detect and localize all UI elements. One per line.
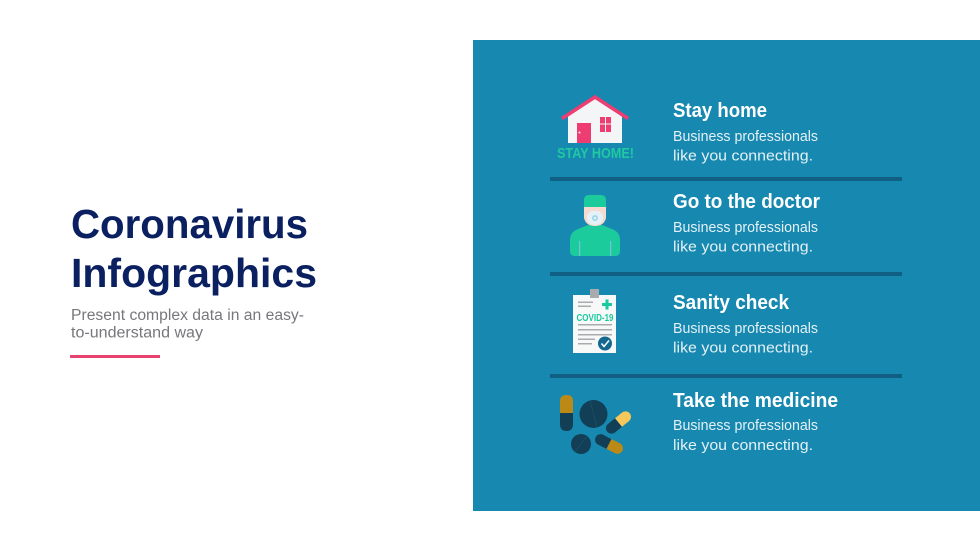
item text: sanity check: Business professionals [673,320,818,337]
divider 2 [550,272,902,276]
item text: doctor: like you connecting. [673,238,813,256]
title [71,201,317,296]
icon: covid-19 clipboard [573,289,616,353]
item text: doctor: Business professionals [673,219,818,236]
icon: doctor [570,195,620,256]
icon: medicine pills [560,395,633,456]
divider 3 [550,374,902,378]
item text: stay home [673,128,818,164]
title: Coronavirus [71,201,308,247]
icon: covid-19 clipboard: COVID-19 [576,312,614,324]
item text: take the medicine: like you connecting. [673,437,813,454]
subtitle [71,307,304,342]
item text: take the medicine: Business professionals [673,417,818,434]
panel: blue background [473,40,980,511]
item text: sanity check [673,320,818,356]
icon: stay home house: STAY HOME! [557,145,634,162]
subtitle: to-understand way [71,324,203,342]
item text: take the medicine [673,417,818,454]
divider 1 [550,177,902,181]
icon: stay home house [557,97,634,162]
item heading: sanity check: Sanity check [673,292,790,314]
subtitle: Present complex data in an easy- [71,307,304,324]
item heading: doctor: Go to the doctor [673,191,820,213]
title: Infographics [71,250,317,296]
item text: stay home: Business professionals [673,128,818,145]
accent underline [70,355,160,358]
item heading: take the medicine: Take the medicine [673,390,838,412]
item heading: stay home: Stay home [673,100,767,122]
item text: stay home: like you connecting. [673,148,813,164]
item text: sanity check: like you connecting. [673,340,813,356]
item text: doctor [673,219,818,256]
